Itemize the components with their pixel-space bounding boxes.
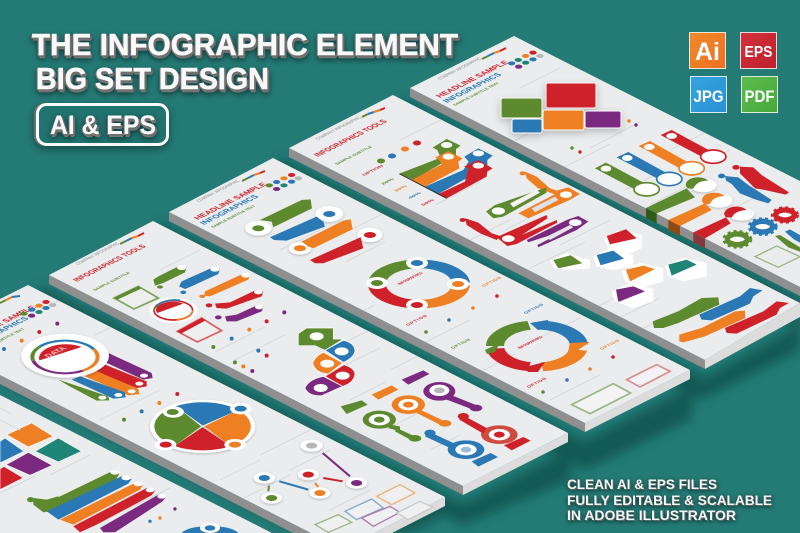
B hexagon callouts	[550, 229, 642, 270]
title: BIG SET DESIGN	[36, 62, 269, 96]
D headline	[71, 243, 149, 291]
D arrow bars	[153, 265, 264, 321]
icon: JPG format: JPG	[694, 87, 724, 106]
feature text: CLEAN AI & EPS FILES	[567, 476, 717, 492]
E dots row	[122, 392, 179, 422]
A folded tabs at page edge	[646, 177, 754, 248]
C headline: SAMPLE SUBTITLE TEXT	[209, 204, 257, 228]
F person and bars	[27, 470, 177, 532]
A people silhouettes	[718, 165, 789, 203]
E colour strip	[0, 296, 20, 303]
E colour swatches	[20, 300, 56, 318]
feature text: IN ADOBE ILLUSTRATOR	[567, 507, 736, 523]
B option labels: 50%	[419, 198, 436, 206]
sheet C: third page	[169, 158, 690, 432]
D tags	[341, 385, 398, 414]
A headline: INFOGRAPHICS	[441, 71, 505, 104]
C option labels: OPTION	[522, 303, 545, 314]
sheet B: second page	[289, 95, 800, 369]
C colour swatches	[266, 173, 302, 191]
A headline: HEADLINE SAMPLE	[434, 59, 512, 99]
feature text: FULLY EDITABLE & SCALABLE	[567, 492, 772, 508]
F ring at bottom edge	[182, 523, 238, 533]
E text lines	[30, 295, 370, 510]
A colour swatches	[508, 51, 544, 69]
E outlined frames	[315, 485, 433, 532]
sheet F: bottom left page	[0, 395, 272, 533]
A overlapping rectangles	[501, 83, 621, 133]
B option labels: OPTION	[360, 164, 385, 176]
E bars from data ring	[58, 353, 153, 401]
title	[32, 28, 458, 96]
icon: EPS format	[740, 32, 776, 68]
icon: PDF format	[742, 76, 778, 112]
sheet A: top right page	[410, 36, 800, 296]
F colour boxes	[0, 423, 82, 490]
C arrow ring	[485, 320, 590, 372]
C colour strip	[242, 171, 265, 181]
icon: PDF format: PDF	[744, 87, 774, 106]
B ribbons	[653, 288, 789, 342]
B headline: SAMPLE SUBTITLE	[333, 145, 374, 165]
D pin nodes	[392, 370, 531, 467]
B person timeline bottom	[460, 215, 588, 247]
C headline: INFOGRAPHICS	[198, 193, 262, 226]
A outlined frame	[755, 246, 800, 267]
D data ring	[149, 298, 197, 323]
D headline: SAMPLE SUBTITLE	[91, 271, 132, 291]
sheet E: fifth page	[0, 285, 445, 533]
C arrow ring: INFOGRAPHICS	[516, 335, 544, 349]
B option labels	[360, 164, 436, 206]
badge: AI and EPS: AI & EPS	[50, 110, 156, 140]
D colour strip	[120, 233, 144, 244]
C headline: HEADLINE SAMPLE	[192, 181, 270, 221]
C company label: COMPANY INFOGRAPHIC	[195, 179, 242, 203]
icon: Ai format	[690, 32, 726, 68]
C option labels: OPTION	[480, 276, 503, 287]
C option labels	[404, 276, 621, 388]
B stacked arrows	[399, 139, 493, 198]
icon: Ai format: Ai	[695, 38, 720, 66]
C option labels: OPTION	[449, 338, 472, 349]
A colour strip	[482, 48, 506, 59]
A gears	[724, 208, 800, 252]
F text lines	[0, 408, 170, 510]
B option labels: 40%	[406, 191, 423, 199]
icon: JPG format	[690, 76, 726, 112]
B colour strip	[362, 108, 385, 117]
B company label: COMPANY INFOGRAPHIC	[314, 116, 364, 141]
A small dots	[570, 119, 638, 154]
D company label: COMPANY INFOGRAPHIC	[74, 242, 122, 266]
C ribbon bars	[245, 199, 383, 263]
D green pin	[363, 411, 400, 431]
D arrow puzzle	[298, 328, 355, 396]
D outlined frames	[114, 286, 222, 342]
B headline	[312, 118, 390, 165]
B option labels: 30%	[392, 184, 409, 192]
C outlined frames	[572, 365, 670, 414]
B headline: INFOGRAPHICS TOOLS	[312, 118, 390, 158]
E node network	[254, 440, 367, 504]
title: THE INFOGRAPHIC ELEMENT	[32, 28, 458, 62]
E dots	[2, 322, 59, 351]
E data ring: DATA	[42, 345, 69, 359]
icon: EPS format: EPS	[744, 44, 773, 61]
C segmented ring: INFOGRAPHICS	[396, 271, 424, 285]
A pill bars with rings	[595, 130, 726, 196]
C option labels: OPTION	[404, 314, 428, 326]
A text lines	[500, 68, 790, 215]
A company label: COMPANY INFOGRAPHIC	[436, 57, 484, 81]
B option labels: 20%	[379, 177, 396, 185]
feature text	[567, 476, 772, 523]
B lower hexagon callouts	[612, 258, 707, 308]
A headline: SAMPLE SUBTITLE TEXT	[451, 81, 501, 106]
E data ring	[21, 334, 109, 378]
D text lines	[160, 250, 460, 450]
C dot rows	[424, 294, 615, 394]
C option labels: OPTION	[525, 377, 548, 388]
C option labels: OPTION	[598, 339, 621, 350]
C text lines	[280, 210, 600, 400]
C segmented ring	[366, 257, 469, 311]
D dot rows	[211, 310, 286, 373]
sheet D: fourth page	[49, 221, 568, 495]
badge: AI and EPS	[38, 104, 168, 144]
B person timeline top	[486, 171, 580, 218]
B pins	[377, 140, 421, 164]
B text lines	[400, 118, 690, 330]
D headline: INFOGRAPHICS TOOLS	[71, 243, 149, 283]
E pie chart	[150, 400, 255, 453]
